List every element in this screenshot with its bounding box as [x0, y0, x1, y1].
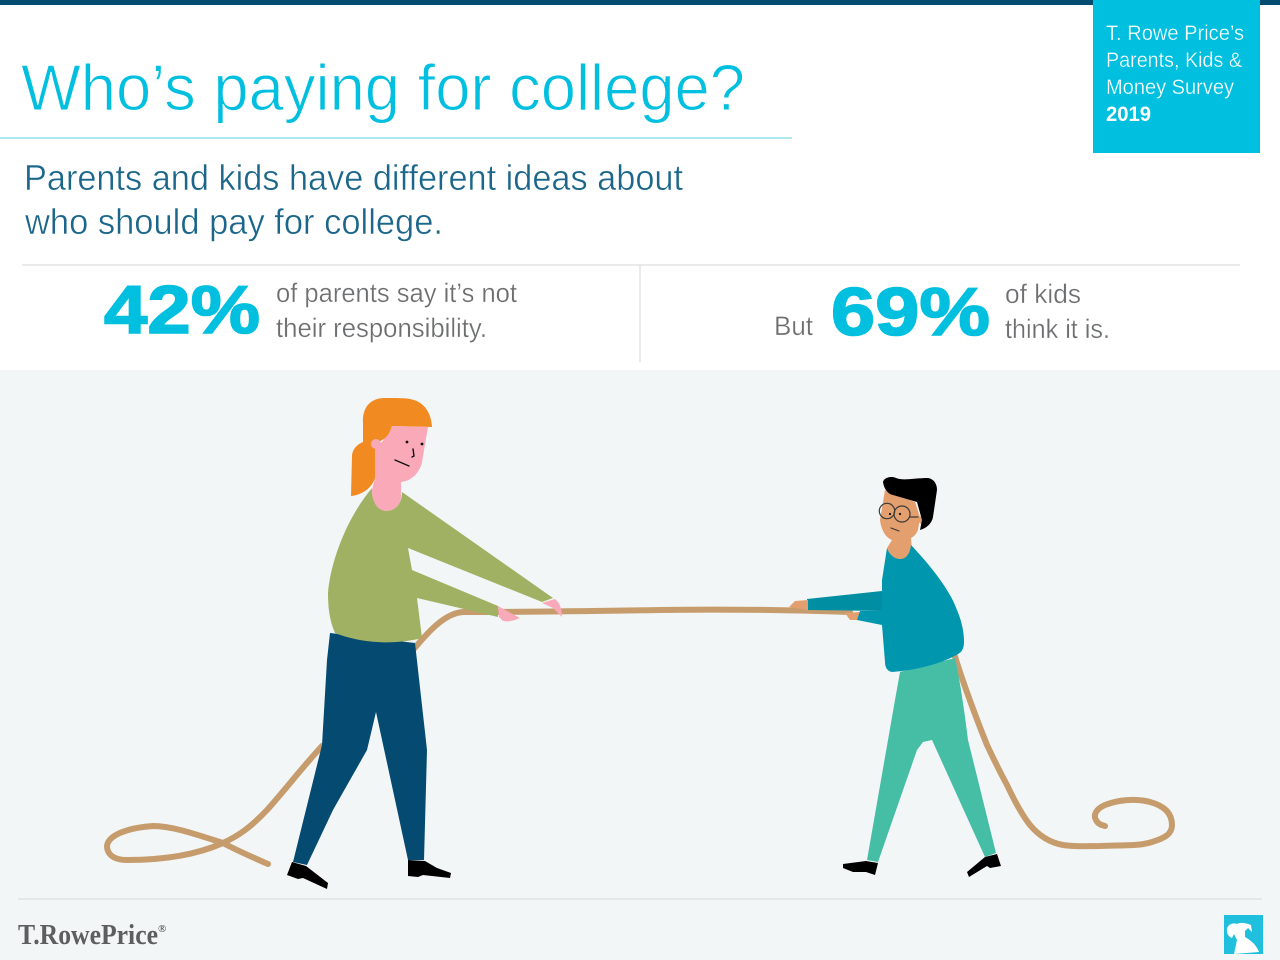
figure: child pulling rope	[789, 477, 1001, 877]
stat: parents 42%	[104, 272, 517, 348]
logo: T. Rowe Price: ®	[158, 923, 166, 935]
parent face features	[395, 441, 423, 466]
title: Who’s paying for college?	[21, 51, 745, 124]
parent face and neck	[372, 426, 428, 511]
stat: kids 69%	[774, 274, 1110, 350]
top bar	[0, 0, 1280, 5]
stat: kids 69%: think it is.	[1005, 314, 1110, 344]
stat: kids 69%: 69%	[831, 274, 990, 350]
parent sweater	[328, 488, 553, 642]
survey badge: Parents, Kids &	[1106, 49, 1242, 72]
stat: parents 42%: of parents say it’s not	[276, 278, 517, 308]
icon: bighorn sheep logo	[1224, 915, 1263, 954]
figure: parent pulling rope	[287, 398, 562, 889]
stat: parents 42%: 42%	[104, 272, 260, 348]
parent hands	[498, 599, 562, 621]
child far arm	[807, 591, 882, 611]
child shoes	[843, 854, 1001, 877]
survey badge: 2019	[1106, 103, 1151, 126]
subtitle	[24, 157, 683, 242]
parent pants	[293, 633, 427, 865]
parent shoes	[287, 860, 451, 889]
subtitle: Parents and kids have different ideas about	[24, 157, 683, 198]
survey badge	[1093, 0, 1260, 153]
child glasses and features	[879, 503, 918, 531]
subtitle: who should pay for college.	[24, 201, 443, 242]
stat: kids 69%: of kids	[1005, 279, 1081, 309]
child sweater	[857, 545, 964, 672]
panel: illustration background	[0, 370, 1280, 960]
child face and neck	[880, 490, 920, 560]
stat: kids 69%: But	[774, 311, 813, 341]
rope	[107, 610, 1172, 864]
child hands	[789, 600, 860, 620]
survey badge: Money Survey	[1106, 76, 1234, 99]
child hair	[883, 477, 937, 530]
stat: parents 42%: their responsibility.	[276, 313, 487, 343]
child pants	[867, 658, 996, 862]
survey badge: T. Rowe Price’s	[1106, 22, 1244, 45]
logo: T. Rowe Price: T.RowePrice	[18, 919, 158, 951]
parent ponytail and hair	[351, 398, 432, 496]
